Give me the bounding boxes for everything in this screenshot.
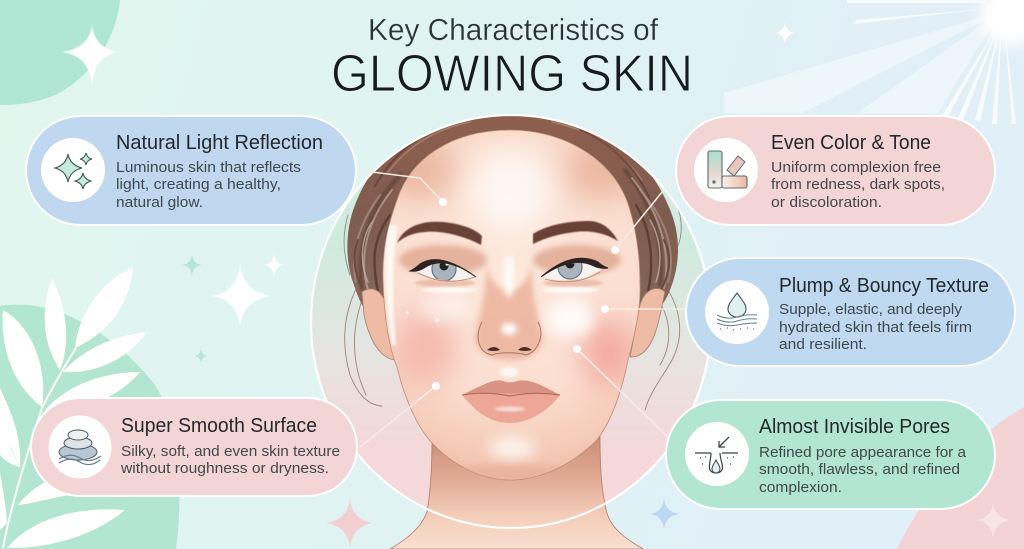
- panel: natural light reflection: [26, 116, 356, 225]
- icon: stacked stones: [48, 416, 112, 478]
- icon: colour swatches: [694, 138, 758, 202]
- title: [331, 12, 693, 103]
- description: [120, 443, 340, 477]
- description: Uniform complexion free: [771, 159, 941, 176]
- description: Refined pore appearance for a: [759, 444, 967, 461]
- panel: almost invisible pores: [666, 400, 995, 509]
- sparkle: corner: [976, 503, 1011, 538]
- neck: [390, 435, 643, 549]
- leader line: even color and tone: [611, 170, 680, 254]
- decorative blob: bottom left: [0, 305, 179, 549]
- leader line: invisible pores: [573, 345, 668, 437]
- decorative blob: top left: [0, 0, 120, 105]
- title line 2: GLOWING SKIN: [331, 45, 693, 103]
- leaf branch: [0, 267, 147, 548]
- description: from redness, dark spots,: [771, 176, 945, 193]
- leader line: plump and bouncy texture: [601, 305, 688, 313]
- hair: [347, 116, 678, 308]
- sparkle: mint small: [195, 349, 207, 363]
- sparkle: centre left small white: [264, 253, 284, 277]
- sun rays: top right: [724, 0, 1024, 124]
- leader line: natural light reflection: [356, 170, 447, 206]
- left eyebrow: [397, 222, 482, 245]
- right eye: [541, 255, 608, 282]
- description: or discoloration.: [771, 194, 882, 211]
- panel: even color and tone: [676, 116, 995, 225]
- description: hydrated skin that feels firm: [779, 319, 972, 336]
- heading: Natural Light Reflection: [116, 132, 323, 154]
- sparkle: centre left large: [212, 262, 272, 328]
- heading: Almost Invisible Pores: [759, 416, 950, 438]
- icon: sparkles: [41, 138, 105, 202]
- sparkle: mint large: [182, 254, 202, 276]
- panel: super smooth surface: [31, 398, 357, 496]
- central disc: [311, 115, 711, 528]
- left ear: [362, 289, 395, 360]
- face shading: [385, 140, 635, 483]
- description: [116, 159, 301, 211]
- portrait: [344, 110, 681, 549]
- disc outline: [311, 115, 711, 528]
- heading: Even Color & Tone: [771, 132, 931, 154]
- right eyebrow: [533, 221, 618, 244]
- description: Supple, elastic, and deeply: [779, 301, 963, 318]
- right ear: [630, 288, 665, 357]
- description: without roughness or dryness.: [120, 460, 329, 477]
- sparkle: blue bottom: [650, 498, 679, 530]
- face: [383, 130, 640, 480]
- sparkle: top left: [62, 24, 118, 86]
- description: [771, 159, 945, 211]
- title line 1: Key Characteristics of: [368, 12, 658, 47]
- leader line: smooth surface: [360, 382, 440, 447]
- sparkle: pink bottom: [326, 498, 373, 548]
- description: Silky, soft, and even skin texture: [121, 443, 340, 460]
- description: light, creating a healthy,: [116, 176, 281, 193]
- icon: pore: [685, 422, 749, 486]
- description: [759, 444, 967, 496]
- lips: [462, 367, 560, 423]
- description: smooth, flawless, and refined: [759, 461, 960, 478]
- decorative corner: bottom right: [897, 407, 1024, 549]
- description: [779, 301, 972, 353]
- loose hair strands: [344, 205, 681, 410]
- description: Luminous skin that reflects: [116, 159, 301, 176]
- description: natural glow.: [116, 194, 203, 211]
- description: and resilient.: [779, 336, 867, 353]
- left eye: [410, 257, 476, 281]
- heading: Super Smooth Surface: [121, 415, 317, 437]
- panel: plump and bouncy texture: [686, 258, 1015, 366]
- nose: [475, 254, 543, 360]
- sparkle: top right: [775, 22, 795, 45]
- heading: Plump & Bouncy Texture: [779, 275, 989, 297]
- icon: water drop on skin: [705, 280, 769, 344]
- description: complexion.: [759, 479, 842, 496]
